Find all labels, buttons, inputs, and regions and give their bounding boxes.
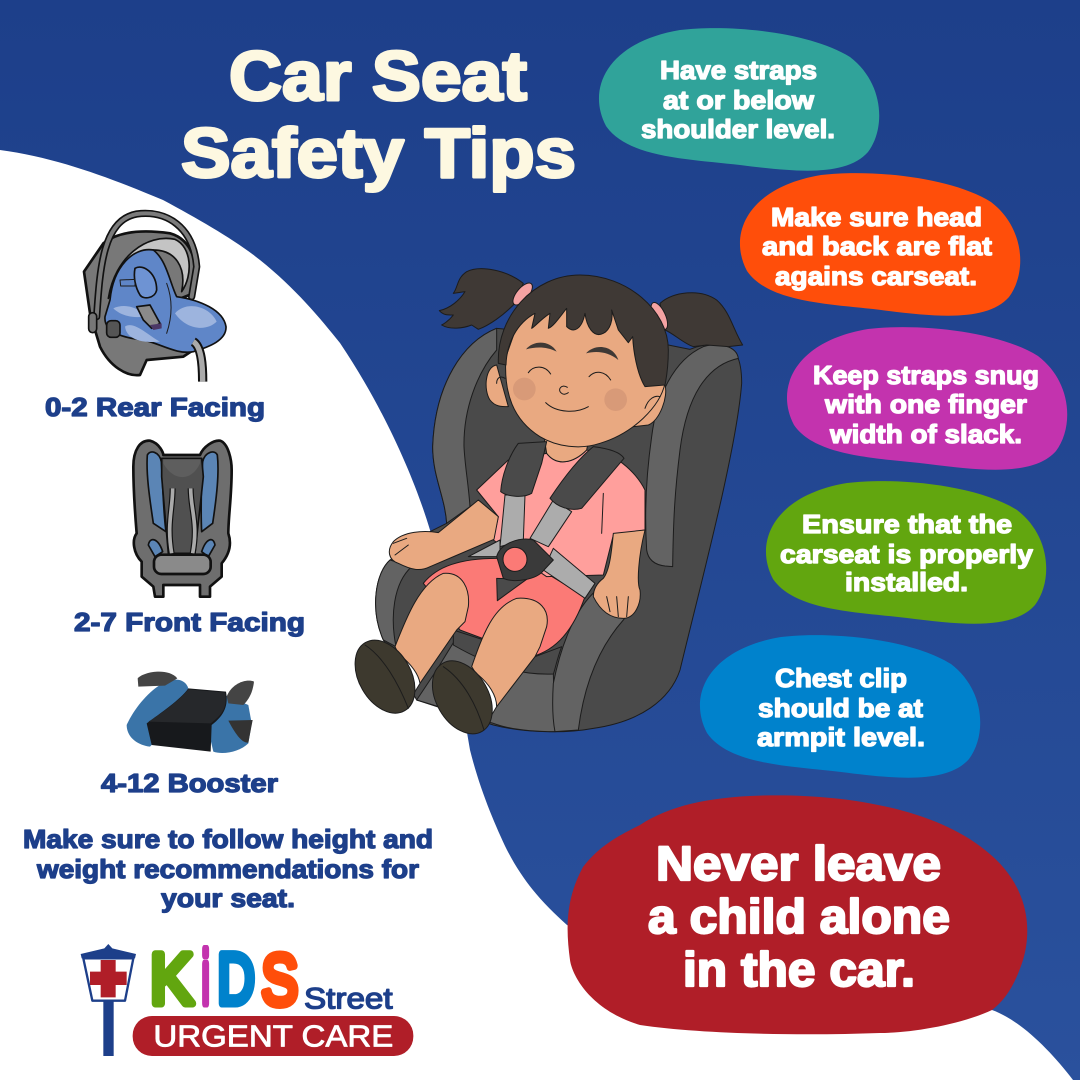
icon: booster seat [127, 672, 254, 753]
logo: Kids Street Urgent Care [81, 935, 413, 1056]
title: Car Seat [229, 37, 527, 115]
tip bubble: straps at shoulder level: at or below [663, 85, 815, 115]
legs [343, 558, 585, 744]
tip bubble: head and back flat [740, 173, 1020, 316]
illustration: girl in car seat [343, 269, 743, 744]
icon: front facing seat [133, 441, 232, 597]
tip bubble: properly installed: Ensure that the [802, 509, 1012, 539]
title: Safety Tips [181, 114, 576, 192]
tip bubble: straps at shoulder level [599, 28, 879, 171]
tip bubble: chest clip: armpit level. [757, 722, 925, 752]
tip bubble: head and back flat: agains carseat. [775, 261, 977, 291]
tip bubble: straps snug: with one finger [824, 389, 1027, 419]
tip bubble: chest clip [700, 635, 980, 778]
logo: Kids Street Urgent Care: Street [304, 982, 393, 1015]
callout: never leave a child alone: in the car. [683, 944, 915, 997]
ponytails [439, 269, 743, 347]
title [181, 37, 576, 192]
icon: rear facing infant seat [84, 213, 226, 382]
logo: Kids Street Urgent Care: S [261, 941, 298, 1021]
tip bubble: chest clip: should be at [758, 693, 923, 723]
tip bubble: properly installed: carseat is properly [780, 539, 1034, 569]
tip bubble: straps snug [787, 327, 1067, 470]
tip bubble: head and back flat: and back are flat [762, 231, 992, 261]
label: 2-7 front facing: 2-7 Front Facing [74, 607, 305, 637]
tip bubble: straps at shoulder level: Have straps [660, 55, 817, 85]
text block: height and weight note [23, 824, 433, 913]
car seat [376, 328, 742, 732]
text block: height and weight note: weight recommendations for [36, 854, 419, 884]
tip bubble: straps snug: width of slack. [829, 419, 1022, 449]
head [486, 275, 668, 447]
tip bubble: head and back flat: Make sure head [771, 202, 982, 232]
tip bubble: straps snug: Keep straps snug [813, 360, 1039, 390]
callout: never leave a child alone: Never leave [656, 838, 941, 891]
shirt and arms [389, 437, 645, 618]
tip bubble: properly installed [766, 481, 1046, 624]
text block: height and weight note: Make sure to follow height and [23, 824, 433, 854]
tip bubble: properly installed: installed. [845, 567, 968, 597]
label: 4-12 booster: 4-12 Booster [101, 768, 278, 798]
tip bubble: straps at shoulder level: shoulder level. [641, 114, 835, 144]
label: 0-2 rear facing: 0-2 Rear Facing [45, 392, 265, 422]
logo: Kids Street Urgent Care: URGENT CARE [153, 1020, 393, 1054]
text block: height and weight note: your seat. [161, 883, 295, 913]
callout: never leave a child alone [568, 795, 1027, 1034]
logo lamp post [81, 944, 136, 1056]
callout: never leave a child alone: a child alone [648, 891, 950, 944]
tip bubble: chest clip: Chest clip [775, 663, 907, 693]
logo: Kids Street Urgent Care: i [202, 935, 210, 1019]
logo: Kids Street Urgent Care: D [217, 939, 255, 1019]
harness straps and buckle [468, 442, 624, 601]
logo wordmark: K [150, 939, 193, 1019]
